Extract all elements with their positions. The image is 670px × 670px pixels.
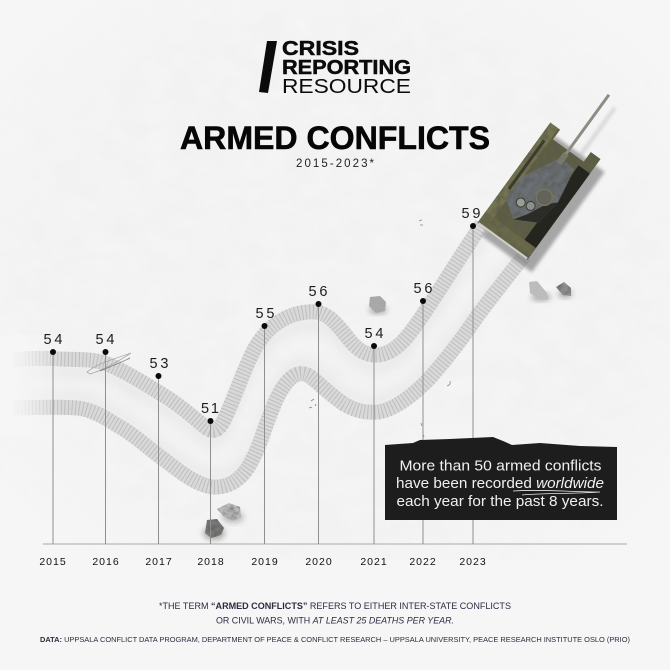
value labels: 55	[256, 306, 274, 322]
tank shadow	[482, 89, 639, 272]
cupolas	[514, 196, 527, 209]
year labels: 2021	[360, 556, 388, 568]
right track	[516, 165, 590, 259]
callout text: each year for the past 8 years.	[396, 494, 604, 510]
callout	[385, 437, 617, 520]
year labels: 2015	[39, 556, 67, 568]
year labels: 2023	[459, 556, 487, 568]
value labels: 54	[364, 326, 384, 342]
torn paper box	[385, 437, 617, 520]
callout text: have been recorded worldwide	[396, 476, 604, 492]
year labels: 2018	[197, 556, 225, 568]
year labels	[39, 556, 487, 568]
value labels: 54	[44, 332, 62, 348]
year labels: 2016	[92, 556, 120, 568]
logo wordmark: CRISIS	[282, 38, 359, 60]
year labels: 2017	[145, 556, 173, 568]
value labels: 56	[414, 281, 432, 297]
barrel	[561, 94, 610, 160]
rear deck	[477, 212, 536, 259]
chart: stems, points and labels	[39, 206, 627, 568]
footnote: *THE TERM “ARMED CONFLICTS” REFERS TO EITHER INTER-STATE CONFLICTS	[159, 601, 511, 611]
rock near tank right	[556, 282, 572, 298]
rock near 2021	[369, 296, 387, 314]
stem lines	[53, 226, 473, 544]
callout text	[396, 458, 604, 510]
lower tread track	[14, 244, 524, 487]
tank hull	[477, 123, 601, 259]
rock near 2018 upper	[217, 503, 244, 523]
data points	[50, 223, 476, 424]
year labels: 2019	[251, 556, 279, 568]
title: ARMED CONFLICTS	[180, 120, 490, 156]
data source: DATA: UPPSALA CONFLICT DATA PROGRAM, DEPARTMENT OF PEACE & CONFLICT RESEARCH – UPPSALA UNIVERSITY, PEACE RESEARCH INSTITUTE OSLO (PRIO)	[40, 635, 630, 644]
rocks	[203, 281, 572, 540]
year labels: 2022	[409, 556, 437, 568]
callout text: More than 50 armed conflicts	[400, 458, 602, 474]
logo	[259, 38, 411, 98]
upper tread track	[14, 224, 482, 443]
subtitle: 2015-2023*	[296, 158, 375, 170]
value labels: 54	[96, 332, 114, 348]
logo wordmark	[282, 38, 411, 98]
footnote	[159, 601, 511, 626]
logo wordmark: RESOURCE	[282, 76, 411, 98]
logo slash	[259, 41, 277, 93]
icon: scratch near 2016	[87, 353, 131, 374]
logo wordmark: REPORTING	[282, 57, 411, 79]
rock near 2018 lower	[203, 519, 225, 540]
tank tracks	[14, 224, 524, 487]
year labels: 2020	[305, 556, 333, 568]
rock near tank left	[529, 281, 551, 301]
small snow marks	[309, 220, 450, 437]
hand-drawn underline	[513, 490, 600, 495]
x axis	[43, 543, 627, 545]
value labels: 51	[201, 401, 219, 417]
footnote: OR CIVIL WARS, WITH AT LEAST 25 DEATHS PER YEAR.	[216, 616, 454, 626]
value labels	[44, 206, 480, 417]
value labels: 59	[462, 206, 480, 222]
value labels: 53	[150, 356, 168, 372]
turret	[499, 146, 580, 235]
value labels: 56	[308, 284, 328, 300]
icon: tank	[477, 77, 634, 260]
